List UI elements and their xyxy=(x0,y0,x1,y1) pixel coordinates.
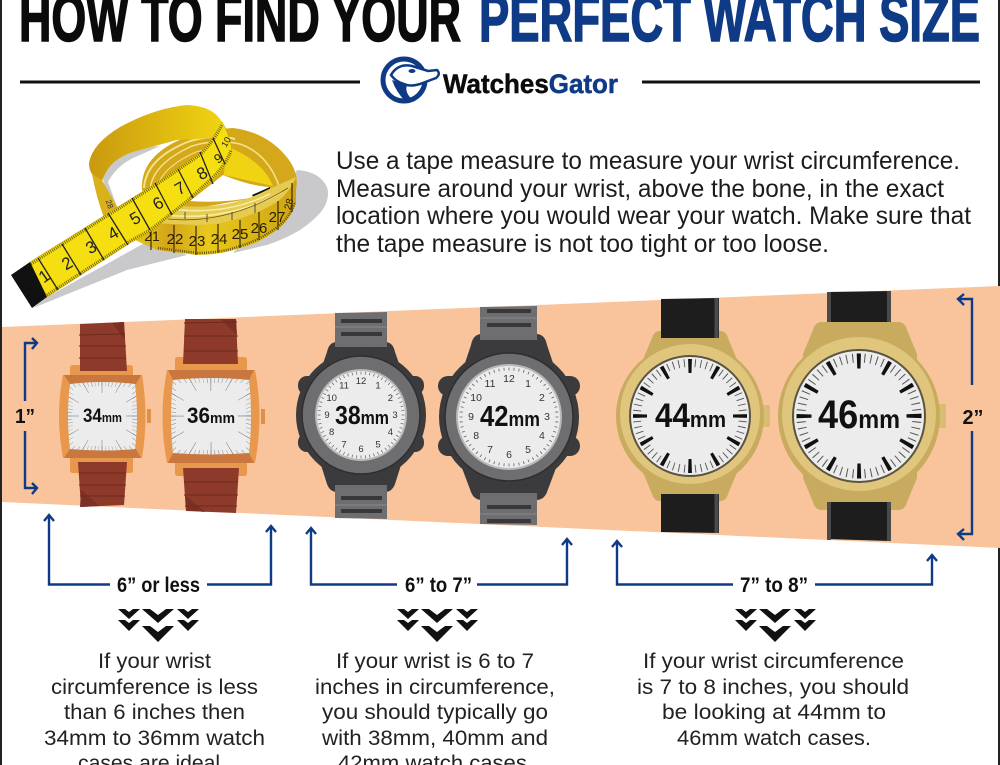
watch: 38mm xyxy=(296,312,426,519)
description: 46mm watch cases. xyxy=(677,726,871,750)
column: 6 to 7 inches xyxy=(306,528,572,765)
range label: 7” to 8” xyxy=(740,574,808,597)
dial xyxy=(793,350,925,482)
case xyxy=(616,342,764,490)
tape centimetre lines xyxy=(38,138,225,290)
watch: 42mm: 5 xyxy=(525,444,531,456)
arrow: 2 inch xyxy=(958,294,984,540)
bracket arrow xyxy=(306,528,572,584)
description: 34mm to 36mm watch xyxy=(44,726,265,750)
column: 6 inches or less xyxy=(44,515,276,765)
watch: 38mm: 3 xyxy=(392,410,398,421)
buttons xyxy=(438,376,580,396)
coil numbers: 22 xyxy=(167,231,183,248)
illustration: yellow tape measure xyxy=(11,105,328,308)
tape numbers xyxy=(35,135,233,287)
description xyxy=(315,649,555,765)
label: 46mm xyxy=(818,393,900,437)
watch: 42mm: 9 xyxy=(468,411,474,423)
description: If your wrist circumference xyxy=(643,649,904,673)
watch: 46mm xyxy=(778,291,946,541)
label: 44mm xyxy=(655,397,726,435)
strap xyxy=(827,291,891,322)
description: be looking at 44mm to xyxy=(662,700,886,724)
black tape tip xyxy=(11,262,47,308)
watch: 38mm: 6 xyxy=(358,444,364,455)
watch: 38mm: 1 xyxy=(375,381,381,392)
coil numbers: 27 xyxy=(269,209,285,226)
range label: 6” to 7” xyxy=(405,574,472,597)
tape numbers: 9 xyxy=(211,150,226,167)
column: 7 to 8 inches xyxy=(612,541,937,750)
coil back xyxy=(142,128,297,215)
crown xyxy=(938,404,946,428)
coil numbers: 25 xyxy=(232,226,248,243)
arrow: 1 inch xyxy=(15,338,37,494)
tape numbers: 3 xyxy=(82,237,100,258)
tape numbers: 2 xyxy=(58,253,76,274)
icon: chevrons xyxy=(397,609,478,642)
watch: 42mm: 2 xyxy=(539,392,545,404)
tape numbers: 5 xyxy=(126,208,144,229)
watch: 42mm: 4 xyxy=(539,430,545,442)
coil front band xyxy=(135,177,296,255)
crown xyxy=(762,405,770,427)
watch: 42mm: 6 xyxy=(506,449,512,461)
tape numbers: 1 xyxy=(35,266,54,287)
bracket arrow xyxy=(612,541,937,584)
label: 36mm xyxy=(187,403,235,428)
watch: 42mm: 10 xyxy=(470,392,482,404)
watch: 38mm: 11 xyxy=(339,381,349,392)
label: 34mm xyxy=(83,405,122,427)
label: 38mm xyxy=(335,400,389,430)
coil numbers: 24 xyxy=(211,231,227,248)
case xyxy=(162,357,260,476)
back loop xyxy=(89,105,222,187)
dial xyxy=(317,371,405,459)
strap xyxy=(183,319,238,364)
intro paragraph: location where you would wear your watch. Make sure that xyxy=(336,202,971,230)
illustration: yellow tape measure: 28 xyxy=(104,198,115,210)
watch: 42mm xyxy=(438,306,580,525)
buttons xyxy=(298,376,424,395)
strap xyxy=(661,298,719,338)
coil numbers xyxy=(144,197,296,250)
lugs xyxy=(452,334,565,500)
watch: 34mm xyxy=(52,322,152,507)
description: inches in circumference, xyxy=(315,675,555,699)
coil upper layers xyxy=(150,177,296,226)
coil numbers: 26 xyxy=(251,220,267,237)
range label: 6” or less xyxy=(117,574,200,597)
description: is 7 to 8 inches, you should xyxy=(637,675,909,699)
watch: 42mm: 8 xyxy=(473,430,479,442)
lugs xyxy=(642,331,738,501)
description: If your wrist xyxy=(98,649,211,673)
watch: 38mm: 7 xyxy=(341,439,347,450)
lugs xyxy=(312,342,410,492)
watch: 38mm: 2 xyxy=(388,393,393,404)
dial xyxy=(68,382,137,450)
icon: gator logo xyxy=(383,59,439,102)
watch: 38mm: 12 xyxy=(356,376,366,387)
tape numbers: 6 xyxy=(149,193,167,214)
case xyxy=(778,335,940,497)
bezel xyxy=(445,353,573,481)
tape numbers: 7 xyxy=(171,178,189,199)
description: than 6 inches then xyxy=(64,700,245,724)
watch: 38mm: 4 xyxy=(388,427,393,438)
white gap inside coil xyxy=(190,175,270,202)
divider and logo xyxy=(20,59,980,102)
watch: 38mm: 9 xyxy=(324,410,330,421)
watch: 42mm: 3 xyxy=(544,411,550,423)
bracket arrow xyxy=(44,515,276,584)
logo wordmark: WatchesGator xyxy=(443,69,618,99)
coil ruler ticks xyxy=(151,183,292,255)
strap xyxy=(335,312,387,347)
watch: 42mm: 7 xyxy=(487,444,493,456)
dial xyxy=(171,378,251,454)
front tape strip xyxy=(30,122,232,297)
arrow: 2 inch: 2” xyxy=(962,407,984,429)
intro paragraph xyxy=(336,147,971,258)
coil numbers: 23 xyxy=(189,233,205,250)
intro paragraph: the tape measure is not too tight or too loose. xyxy=(336,230,829,258)
case xyxy=(59,365,146,473)
lugs xyxy=(803,322,917,510)
left part of loop under the tape xyxy=(92,174,118,218)
peach band xyxy=(2,286,1000,548)
tape shadows xyxy=(33,146,328,308)
tape numbers: 4 xyxy=(104,223,122,244)
watch: 38mm: 5 xyxy=(375,439,381,450)
dial xyxy=(458,366,560,468)
intro paragraph: Use a tape measure to measure your wrist circumference. xyxy=(336,147,960,175)
strap xyxy=(480,306,537,340)
description: circumference is less xyxy=(51,675,258,699)
tape numbers: 10 xyxy=(219,135,233,149)
watch: 36mm xyxy=(155,319,267,513)
watch: 42mm: 1 xyxy=(525,378,531,390)
intro paragraph: Measure around your wrist, above the bone, in the exact xyxy=(336,175,944,203)
description: with 38mm, 40mm and xyxy=(321,726,548,750)
description xyxy=(44,649,265,765)
icon: chevrons xyxy=(118,609,199,642)
description xyxy=(637,649,909,750)
bezel xyxy=(302,356,420,474)
strap xyxy=(80,322,127,371)
dial xyxy=(630,356,750,476)
watch: 42mm: 11 xyxy=(485,378,496,390)
watch: 38mm: 8 xyxy=(329,427,334,438)
watch: 42mm: 12 xyxy=(503,373,515,385)
watch: 44mm xyxy=(616,298,770,533)
description: If your wrist is 6 to 7 xyxy=(336,649,534,673)
watch: 38mm: 10 xyxy=(326,393,337,404)
icon: chevrons xyxy=(735,609,816,642)
label: 42mm xyxy=(480,401,540,433)
arrow: 1 inch: 1” xyxy=(15,406,35,428)
description: you should typically go xyxy=(322,700,548,724)
tape ruler edges xyxy=(31,125,231,295)
coil numbers: 21 xyxy=(144,228,160,244)
tape numbers: 8 xyxy=(193,163,211,184)
coil numbers: 28 xyxy=(283,197,296,211)
title xyxy=(19,0,980,56)
